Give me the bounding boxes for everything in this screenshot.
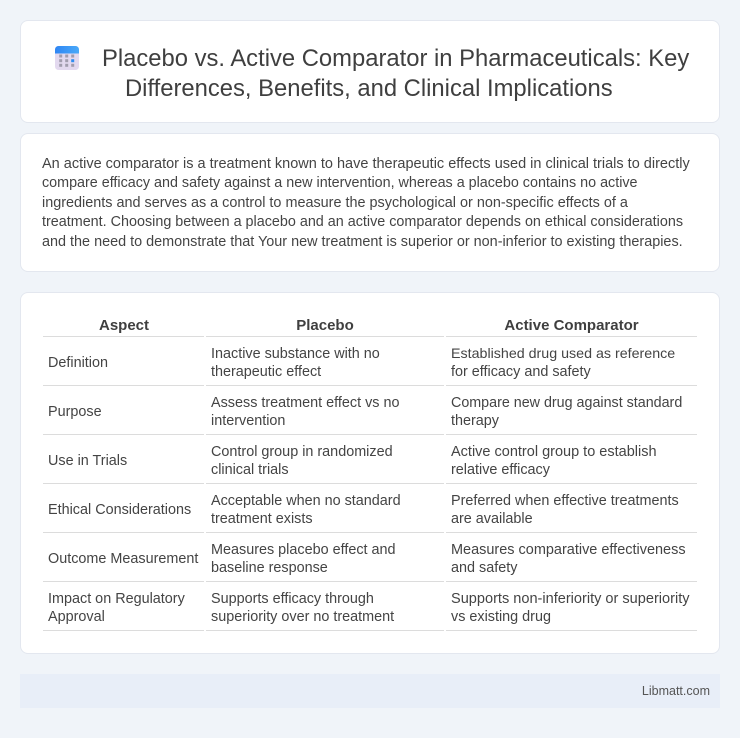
row: Impact on Regulatory Approval: Supports efficacy through [211, 591, 374, 607]
table header: Active Comparator [504, 317, 639, 334]
row: Use in Trials: clinical trials [211, 462, 289, 478]
text block: introduction: compare efficacy and safety against a new intervention, whereas a placebo contains no active [42, 175, 638, 191]
title: Placebo vs. Active Comparator in Pharmaceuticals: Key [102, 45, 689, 72]
row: Use in Trials: Active control group to establish [451, 444, 657, 460]
text block: introduction: and the need to demonstrate that Your new treatment is superior or non-inferior to existing therapies. [42, 234, 683, 250]
row: Definition: Inactive substance with no [211, 346, 380, 362]
row: Purpose [43, 395, 697, 435]
row: Impact on Regulatory Approval: Approval [48, 609, 105, 625]
footer [20, 674, 720, 708]
row: Purpose: therapy [451, 413, 499, 429]
table header: Placebo [296, 317, 354, 334]
row: Impact on Regulatory Approval: superiority over no treatment [211, 609, 394, 625]
row: Impact on Regulatory Approval [43, 591, 697, 631]
row: Use in Trials: Control group in randomized [211, 444, 393, 460]
table header [43, 317, 697, 337]
text block: introduction [42, 156, 690, 250]
panel: title [20, 20, 720, 123]
row: Definition [43, 346, 697, 386]
text block: introduction: An active comparator is a treatment known to have therapeutic effects used in clinical trials to directly [42, 156, 690, 172]
row: Impact on Regulatory Approval: vs existing drug [451, 609, 551, 625]
icon: calendar [55, 46, 79, 70]
row: Ethical Considerations [43, 493, 697, 533]
row: Outcome Measurement: baseline response [211, 560, 328, 576]
row: Ethical Considerations: are available [451, 511, 533, 527]
row: Outcome Measurement: Measures placebo effect and [211, 542, 396, 558]
row: Purpose: Assess treatment effect vs no [211, 395, 400, 411]
row: Outcome Measurement: Measures comparative effectiveness [451, 542, 686, 558]
footer: Libmatt.com [642, 684, 710, 698]
row: Purpose: Compare new drug against standard [451, 395, 682, 411]
row: Purpose: intervention [211, 413, 285, 429]
panel: comparison table [20, 292, 720, 654]
row: Outcome Measurement: Outcome Measurement [48, 551, 198, 567]
title [102, 45, 690, 102]
row: Definition: for efficacy and safety [451, 364, 591, 380]
row: Definition: Definition [48, 355, 108, 371]
row: Ethical Considerations: Acceptable when no standard [211, 493, 401, 509]
row: Impact on Regulatory Approval: Impact on Regulatory [48, 591, 185, 607]
panel: introduction [20, 133, 720, 272]
row: Ethical Considerations: treatment exists [211, 511, 313, 527]
row: Ethical Considerations: Ethical Considerations [48, 502, 191, 518]
row: Impact on Regulatory Approval: Supports non-inferiority or superiority [451, 591, 690, 607]
row: Use in Trials [43, 444, 697, 484]
row: Outcome Measurement [43, 542, 697, 582]
row: Use in Trials: relative efficacy [451, 462, 550, 478]
table header: Aspect [99, 317, 149, 334]
row: Use in Trials: Use in Trials [48, 453, 127, 469]
title: Differences, Benefits, and Clinical Implications [125, 75, 613, 102]
row: Outcome Measurement: and safety [451, 560, 517, 576]
row: Ethical Considerations: Preferred when effective treatments [451, 493, 679, 509]
text block: introduction: treatment. Choosing between a placebo and an active comparator depends on ethical considerations [42, 214, 683, 230]
row: Definition: therapeutic effect [211, 364, 321, 380]
row: Purpose: Purpose [48, 404, 102, 420]
text block: introduction: ingredients and serves as a control to measure the psychological or non-specific effects of a [42, 195, 628, 211]
row: Definition: Established drug used as reference [451, 346, 675, 362]
